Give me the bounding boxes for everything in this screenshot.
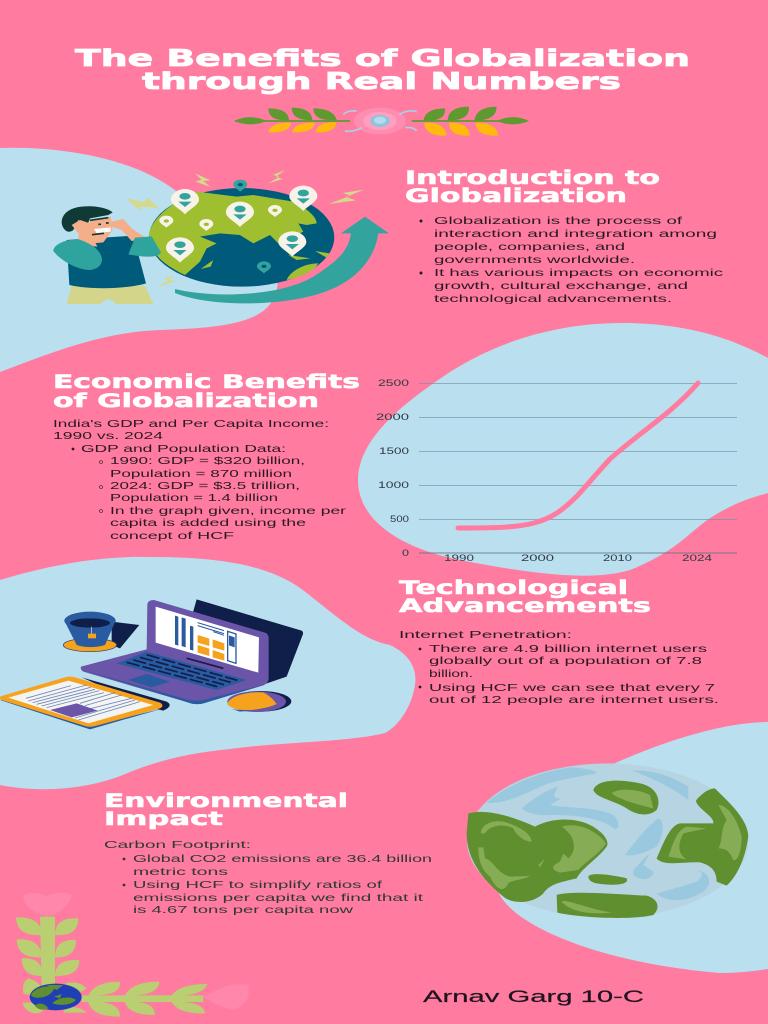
heading: economic benefits [53,372,360,412]
heading: technological: Technological [399,578,628,599]
text: environmental bullets: Global CO2 emissions are 36.4 billion [133,853,432,865]
text: economic data: GDP and Population Data: [81,443,286,455]
line chart: income per capita: 2500 [378,378,409,388]
text: economic data: Population = 1.4 billion [110,492,278,504]
text: introduction bullets: growth, cultural exchange, and [434,280,688,292]
text: technological bullets [399,629,719,706]
text: introduction bullets [420,215,723,305]
text: economic data: 1990 vs. 2024 [53,430,163,442]
heading: economic benefits: of Globalization [53,391,319,412]
heading: economic benefits: Economic Benefits [53,372,360,393]
heading: introduction: Introduction to [405,168,660,189]
heading: environmental [104,791,348,830]
line chart: income per capita: 0 [402,548,409,558]
text: technological bullets: globally out of a population of 7.8 [429,655,702,667]
icon: pale flowers [23,893,249,1009]
icon: globe [149,180,334,287]
text: technological bullets: billion. [429,668,473,680]
icon: mouse [227,691,291,712]
line chart: income per capita: 1000 [378,480,409,490]
text: economic data: India's GDP and Per Capita Income: [53,418,329,430]
line chart: income per capita: 2000 [376,412,409,422]
flourish divider [234,107,529,136]
blob: laptop background [0,557,415,789]
line chart: income per capita: 2010 [603,553,632,563]
text: environmental bullets: Using HCF to simplify ratios of [133,879,382,891]
icon: vine [16,917,207,1017]
oceans [487,767,709,900]
text: technological bullets: There are 4.9 billion internet users [429,643,707,655]
text: introduction bullets: people, companies, and [434,241,625,253]
icon: small earth [30,984,82,1010]
text: technological bullets: Internet Penetration: [399,629,572,641]
text: economic data: 1990: GDP = $320 billion, [110,455,305,467]
heading: technological: Advancements [399,596,651,617]
illustration: person with globe [53,170,389,304]
icon: lightning bolts [126,170,364,287]
heading: environmental: Impact [104,809,223,830]
highlights [478,790,742,913]
text: introduction bullets: interaction and integration among [434,228,717,240]
text: introduction bullets: It has various impacts on economic [434,267,723,279]
heading: introduction [405,168,660,207]
line chart: income per capita [376,378,737,563]
line chart: income per capita: 2024 [682,553,712,563]
person [53,206,161,304]
heading: introduction: Globalization [405,186,627,207]
illustration: laptop on desk [0,599,303,729]
line chart: income per capita: 500 [390,514,409,524]
text: environmental bullets: metric tons [133,866,228,878]
icon: laptop [81,599,303,704]
text: technological bullets: Using HCF we can see that every 7 [429,682,715,694]
blob: intro background [0,148,278,372]
text: environmental bullets: is 4.67 tons per capita now [133,904,354,916]
text: economic data [53,418,347,542]
line chart: income per capita: 1990 [444,553,474,563]
title: The Benefits of Globalization [75,46,690,72]
text: economic data: 2024: GDP = $3.5 trillion, [110,480,300,492]
text: environmental bullets: emissions per capita we find that it [133,892,423,904]
line chart: income per capita: 1500 [379,446,409,456]
icon: tea cup [63,612,139,652]
title: through Real Numbers [142,69,621,95]
text: economic data: Population = 870 million [110,468,292,480]
corner floral with small earth [16,893,249,1017]
text: environmental bullets: Carbon Footprint: [104,839,251,851]
blob: chart background [358,323,768,576]
line chart: income per capita: 2000 [521,553,554,563]
icon: tablet [0,677,170,729]
text: environmental bullets [104,839,432,916]
arrow: growth [175,217,389,303]
continents [467,812,607,902]
text: introduction bullets: governments worldwide. [434,254,635,266]
text: technological bullets: out of 12 people are internet users. [429,694,719,706]
text: economic data: capita is added using the [110,517,306,529]
heading: technological [399,578,651,617]
blob: earth background [490,722,768,973]
illustration: earth [467,763,748,918]
author name: Arnav Garg 10-C [423,987,644,1006]
text: introduction bullets: technological advancements. [434,293,672,305]
title [75,46,690,95]
heading: environmental: Environmental [104,791,348,812]
text: economic data: concept of HCF [110,530,234,542]
text: economic data: In the graph given, income per [110,505,347,517]
text: introduction bullets: Globalization is the process of [434,215,682,227]
